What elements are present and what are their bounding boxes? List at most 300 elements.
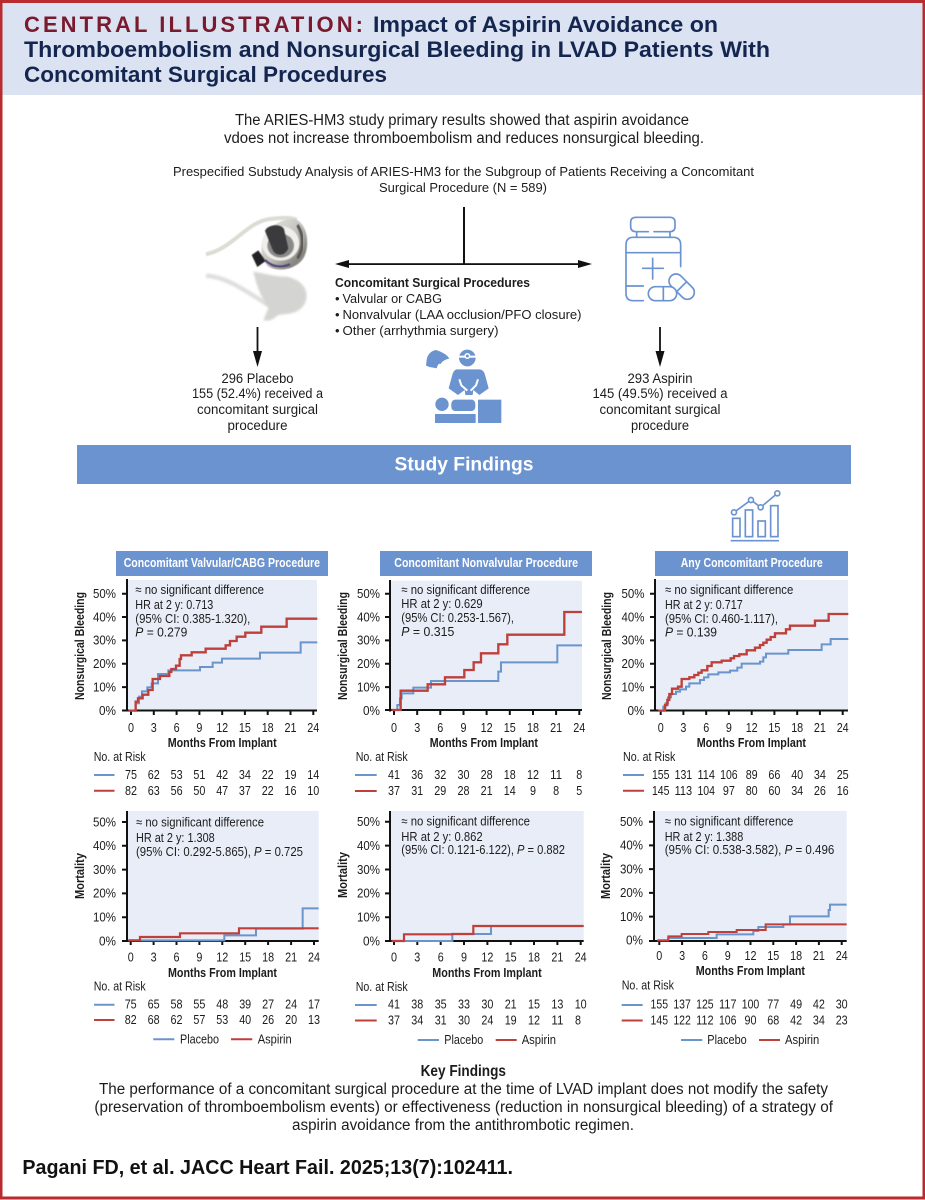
number at risk table: 21 xyxy=(505,996,517,1012)
number at risk table: 20 xyxy=(285,1012,297,1027)
y axis label: Mortality xyxy=(72,852,87,899)
x tick labels: 3 xyxy=(679,948,685,963)
number at risk table: 100 xyxy=(742,996,759,1012)
number at risk table: 11 xyxy=(550,767,562,782)
procedures list: • xyxy=(335,323,340,338)
legend: Aspirin xyxy=(522,1032,556,1047)
x tick labels: 3 xyxy=(151,950,157,964)
x tick labels: 24 xyxy=(837,720,849,735)
number at risk table: 125 xyxy=(696,996,714,1012)
number at risk table: 131 xyxy=(675,767,692,782)
number at risk table: 31 xyxy=(411,783,423,798)
y tick labels: 0% xyxy=(99,703,116,718)
x tick labels: 15 xyxy=(504,720,516,735)
panel heading: nonvalvular: Concomitant Nonvalvular Procedure xyxy=(394,556,578,570)
legend: Placebo xyxy=(444,1032,483,1047)
number at risk table: 68 xyxy=(148,1012,160,1027)
x tick labels: 15 xyxy=(768,720,780,735)
number at risk table xyxy=(94,749,319,798)
survival curves xyxy=(129,619,317,711)
y tick labels: 20% xyxy=(620,885,643,900)
procedures list: Other (arrhythmia surgery) xyxy=(342,323,498,338)
procedures list xyxy=(335,275,582,338)
y tick labels: 30% xyxy=(357,633,380,648)
annotation xyxy=(135,582,264,640)
intro text: The ARIES-HM3 study primary results showed that aspirin avoidance xyxy=(235,112,689,129)
panel heading: valvular/CABG: Concomitant Valvular/CABG Procedure xyxy=(124,556,320,570)
survival curves xyxy=(128,908,319,940)
number at risk table: 90 xyxy=(744,1012,756,1028)
procedures list: Valvular or CABG xyxy=(342,291,442,306)
number at risk table: 22 xyxy=(262,783,274,798)
number at risk table: 35 xyxy=(435,996,447,1012)
annotation: (95% CI: 0.385-1.320), xyxy=(135,611,250,626)
x tick labels: 15 xyxy=(767,948,779,963)
number at risk table: 68 xyxy=(767,1012,779,1028)
x tick labels: 6 xyxy=(702,948,708,963)
y tick labels: 40% xyxy=(357,609,380,624)
banner: Study Findings: Study Findings xyxy=(394,454,534,476)
number at risk table: 155 xyxy=(652,767,669,782)
x tick labels: 9 xyxy=(196,950,202,964)
x tick labels: 0 xyxy=(656,948,662,963)
key findings: (preservation of thromboembolism events) or effectiveness (reduction in nonsurgical bleeding) of a strategy of xyxy=(94,1099,834,1116)
number at risk table: 28 xyxy=(481,767,493,782)
number at risk table: 26 xyxy=(814,783,826,798)
y tick labels: 0% xyxy=(628,703,645,718)
number at risk table: 80 xyxy=(746,783,758,798)
placebo arm text xyxy=(192,371,323,433)
y tick labels: 50% xyxy=(620,814,643,829)
title: Concomitant Surgical Procedures xyxy=(24,62,387,87)
x tick labels: 6 xyxy=(703,720,709,735)
number at risk table: 49 xyxy=(790,996,802,1012)
x tick labels xyxy=(128,720,319,735)
annotation: P = 0.139 xyxy=(665,624,717,640)
legend: Placebo xyxy=(707,1032,747,1047)
y tick labels: 30% xyxy=(93,862,116,877)
x tick labels: 6 xyxy=(174,720,180,735)
y tick labels: 20% xyxy=(622,656,645,671)
number at risk table: 47 xyxy=(216,783,228,798)
y tick labels: 20% xyxy=(357,886,380,901)
placebo arm text: 155 (52.4%) received a xyxy=(192,386,323,401)
number at risk table: 56 xyxy=(171,783,183,798)
number at risk table: 23 xyxy=(836,1012,848,1028)
x tick labels: 24 xyxy=(836,948,848,963)
y axis label: Nonsurgical Bleeding xyxy=(72,592,87,700)
y tick labels xyxy=(357,586,380,718)
y tick labels: 50% xyxy=(357,586,380,601)
number at risk table: 32 xyxy=(434,767,446,782)
number at risk table: 12 xyxy=(528,1012,540,1028)
number at risk table: 13 xyxy=(308,1012,320,1027)
annotation: HR at 2 y: 0.862 xyxy=(401,829,483,844)
y tick labels: 40% xyxy=(357,838,380,853)
y axis label: Nonsurgical Bleeding xyxy=(599,592,614,700)
chart: nonsurgical bleeding, any procedure xyxy=(599,579,849,798)
survival curves xyxy=(658,614,848,711)
number at risk table: No. at Risk xyxy=(622,978,674,992)
y tick labels: 40% xyxy=(93,838,116,853)
x tick labels: 0 xyxy=(658,720,664,735)
number at risk table: 145 xyxy=(652,783,669,798)
substudy description: Prespecified Substudy Analysis of ARIES-HM3 for the Subgroup of Patients Receiving a Concomitant xyxy=(173,164,754,179)
annotation: (95% CI: 0.253-1.567), xyxy=(401,610,514,625)
x tick labels: 24 xyxy=(573,720,585,735)
y tick labels: 50% xyxy=(93,814,116,829)
number at risk table: 62 xyxy=(170,1012,182,1027)
number at risk table: 57 xyxy=(193,1012,205,1027)
number at risk table: 106 xyxy=(720,767,738,782)
number at risk table: 53 xyxy=(216,1012,228,1027)
y tick labels: 50% xyxy=(622,586,645,601)
x tick labels: 9 xyxy=(461,950,467,964)
annotation: HR at 2 y: 0.629 xyxy=(401,596,483,611)
y tick labels xyxy=(93,814,116,948)
x tick labels: 3 xyxy=(414,720,420,735)
icon: bar chart with trend line xyxy=(731,491,780,541)
number at risk table: 10 xyxy=(575,996,587,1012)
x tick labels: 3 xyxy=(680,720,686,735)
key findings: The performance of a concomitant surgical procedure at the time of LVAD implant does not modify the safety xyxy=(99,1081,828,1098)
legend xyxy=(681,1032,819,1047)
number at risk table: 75 xyxy=(125,767,137,782)
x tick labels: 12 xyxy=(746,720,758,735)
x tick labels: 21 xyxy=(813,948,825,963)
annotation: P = 0.279 xyxy=(135,624,187,640)
chart: nonsurgical bleeding, nonvalvular xyxy=(335,580,585,798)
citation: Pagani FD, et al. JACC Heart Fail. 2025;13(7):102411. xyxy=(22,1157,513,1179)
y tick labels: 50% xyxy=(357,814,380,829)
number at risk table: 34 xyxy=(814,767,826,782)
number at risk table: 19 xyxy=(284,767,296,782)
key findings: aspirin avoidance from the antithrombotic regimen. xyxy=(292,1117,634,1134)
number at risk table xyxy=(623,749,849,798)
legend: Placebo xyxy=(180,1032,219,1046)
number at risk table: 106 xyxy=(719,1012,736,1028)
number at risk table: 58 xyxy=(170,996,182,1012)
key findings: Key Findings xyxy=(421,1063,506,1080)
number at risk table: 33 xyxy=(458,996,470,1012)
x axis label: Months From Implant xyxy=(430,735,539,750)
number at risk table: 122 xyxy=(673,1012,691,1028)
x axis label: Months From Implant xyxy=(168,965,278,980)
y tick labels xyxy=(620,814,643,948)
number at risk table xyxy=(94,978,320,1027)
number at risk table: 34 xyxy=(411,1012,423,1028)
number at risk table: No. at Risk xyxy=(356,979,408,994)
y tick labels xyxy=(357,814,380,948)
aspirin arm text: 145 (49.5%) received a xyxy=(592,386,728,401)
key findings xyxy=(94,1063,834,1134)
number at risk table: 104 xyxy=(697,783,715,798)
icon: surgeon and patient xyxy=(426,350,501,423)
number at risk table: 8 xyxy=(553,783,559,798)
x tick labels: 18 xyxy=(527,720,539,735)
number at risk table: 97 xyxy=(723,783,735,798)
y tick labels: 10% xyxy=(357,679,380,694)
number at risk table: 42 xyxy=(216,767,228,782)
x tick labels: 21 xyxy=(551,950,563,964)
y tick labels: 10% xyxy=(357,910,380,924)
annotation: HR at 2 y: 0.717 xyxy=(665,597,743,612)
y tick labels: 0% xyxy=(363,933,380,948)
annotation: (95% CI: 0.292-5.865), P = 0.725 xyxy=(136,844,303,859)
number at risk table: 34 xyxy=(813,1012,825,1028)
annotation: (95% CI: 0.121-6.122), P = 0.882 xyxy=(401,842,565,857)
number at risk table: 155 xyxy=(651,996,668,1012)
x tick labels: 0 xyxy=(391,720,397,735)
number at risk table: 38 xyxy=(411,996,423,1012)
annotation: ≈ no significant difference xyxy=(136,815,264,830)
placebo arm text: concomitant surgical xyxy=(197,402,318,417)
y tick labels: 30% xyxy=(357,862,380,877)
x tick labels: 18 xyxy=(791,720,803,735)
number at risk table: 145 xyxy=(651,1012,668,1028)
annotation xyxy=(665,582,793,640)
number at risk table: 41 xyxy=(388,767,400,782)
x tick labels: 18 xyxy=(790,948,802,963)
number at risk table: 11 xyxy=(551,1012,563,1028)
annotation: HR at 2 y: 1.388 xyxy=(665,829,743,844)
x axis label: Months From Implant xyxy=(432,965,542,980)
y tick labels: 40% xyxy=(620,838,643,853)
survival curves xyxy=(392,612,582,710)
panel heading: any procedure xyxy=(655,551,848,576)
y tick labels: 20% xyxy=(93,656,116,671)
x tick labels: 18 xyxy=(528,950,540,964)
number at risk table: 19 xyxy=(505,1012,517,1028)
y tick labels: 20% xyxy=(357,656,380,671)
panel heading: any procedure: Any Concomitant Procedure xyxy=(681,556,823,570)
number at risk table: 114 xyxy=(697,767,715,782)
number at risk table: 34 xyxy=(239,767,251,782)
number at risk table xyxy=(355,749,582,798)
y tick labels: 0% xyxy=(363,703,380,718)
x tick labels: 24 xyxy=(308,950,320,964)
x tick labels: 18 xyxy=(262,720,274,735)
number at risk table: 15 xyxy=(528,996,540,1012)
number at risk table: 5 xyxy=(576,783,582,798)
number at risk table: 28 xyxy=(458,783,470,798)
y tick labels: 0% xyxy=(626,933,643,948)
y axis label: Nonsurgical Bleeding xyxy=(335,592,350,700)
number at risk table: 9 xyxy=(530,783,536,798)
y tick labels: 10% xyxy=(93,910,116,924)
chart: mortality, valvular/CABG xyxy=(72,811,320,1046)
number at risk table: No. at Risk xyxy=(623,749,676,764)
aspirin arm text: procedure xyxy=(631,418,689,433)
x tick labels: 15 xyxy=(239,950,251,964)
number at risk table: 30 xyxy=(836,996,848,1012)
x tick labels xyxy=(128,950,320,964)
intro text: vdoes not increase thromboembolism and reduces nonsurgical bleeding. xyxy=(224,130,704,147)
x tick labels: 21 xyxy=(284,720,296,735)
x tick labels: 12 xyxy=(481,950,493,964)
number at risk table: 14 xyxy=(307,767,319,782)
icon: LVAD pump xyxy=(206,218,307,321)
panel heading: nonvalvular xyxy=(380,551,592,576)
icon: medication bottle and pills xyxy=(626,217,697,302)
number at risk table: 40 xyxy=(791,767,803,782)
number at risk table: 55 xyxy=(193,996,205,1012)
number at risk table: 112 xyxy=(696,1012,714,1028)
substudy description xyxy=(173,164,754,195)
annotation: (95% CI: 0.538-3.582), P = 0.496 xyxy=(665,842,834,857)
legend xyxy=(418,1032,556,1047)
x tick labels: 6 xyxy=(437,720,443,735)
number at risk table: 42 xyxy=(813,996,825,1012)
x tick labels: 9 xyxy=(726,720,732,735)
y tick labels: 10% xyxy=(622,679,645,694)
annotation: ≈ no significant difference xyxy=(135,582,264,597)
number at risk table: 31 xyxy=(435,1012,447,1028)
survival curves xyxy=(392,926,584,941)
x tick labels: 3 xyxy=(414,950,420,964)
intro text xyxy=(224,112,704,147)
number at risk table: 60 xyxy=(768,783,780,798)
number at risk table: 18 xyxy=(504,767,516,782)
number at risk table: 66 xyxy=(768,767,780,782)
x tick labels: 12 xyxy=(481,720,493,735)
number at risk table: 17 xyxy=(308,996,320,1012)
chart: mortality, any procedure xyxy=(598,811,848,1047)
number at risk table: 48 xyxy=(216,996,228,1012)
number at risk table: 82 xyxy=(125,1012,137,1027)
aspirin arm text: concomitant surgical xyxy=(600,402,720,417)
number at risk table xyxy=(622,978,848,1028)
title: Impact of Aspirin Avoidance on xyxy=(373,12,718,37)
number at risk table: 14 xyxy=(504,783,516,798)
y axis label: Mortality xyxy=(598,852,613,899)
survival curves xyxy=(657,905,847,940)
number at risk table: 26 xyxy=(262,1012,274,1027)
number at risk table: 39 xyxy=(239,996,251,1012)
x tick labels: 6 xyxy=(438,950,444,964)
number at risk table: 41 xyxy=(388,996,400,1012)
annotation: (95% CI: 0.460-1.117), xyxy=(665,611,778,626)
y tick labels: 30% xyxy=(93,633,116,648)
title: CENTRAL ILLUSTRATION: xyxy=(24,12,363,37)
annotation: ≈ no significant difference xyxy=(665,814,793,828)
title xyxy=(24,12,770,87)
panel heading: valvular/CABG xyxy=(116,551,328,576)
annotation xyxy=(401,814,565,857)
x tick labels: 9 xyxy=(725,948,731,963)
x tick labels: 12 xyxy=(744,948,756,963)
y tick labels: 40% xyxy=(622,609,645,624)
procedures list: • xyxy=(335,291,340,306)
number at risk table: 65 xyxy=(148,996,160,1012)
number at risk table: 24 xyxy=(481,1012,493,1028)
x tick labels: 0 xyxy=(391,950,397,964)
arrow: placebo arm xyxy=(253,327,262,367)
x tick labels: 12 xyxy=(216,950,228,964)
x tick labels: 3 xyxy=(151,720,157,735)
number at risk table: No. at Risk xyxy=(94,749,146,764)
annotation: HR at 2 y: 0.713 xyxy=(135,597,213,612)
x tick labels: 0 xyxy=(128,950,134,964)
y tick labels: 40% xyxy=(93,609,116,624)
number at risk table: 53 xyxy=(171,767,183,782)
number at risk table: 30 xyxy=(458,767,470,782)
aspirin arm text xyxy=(592,371,728,433)
number at risk table: 30 xyxy=(481,996,493,1012)
number at risk table: 36 xyxy=(411,767,423,782)
aspirin arm text: 293 Aspirin xyxy=(628,371,692,386)
banner: Study Findings xyxy=(77,445,851,484)
arrow: aspirin arm xyxy=(656,327,664,367)
y axis label: Mortality xyxy=(335,851,350,898)
placebo arm text: 296 Placebo xyxy=(222,371,294,386)
number at risk table: 27 xyxy=(262,996,274,1012)
number at risk table: 51 xyxy=(193,767,205,782)
y tick labels: 30% xyxy=(622,633,645,648)
x tick labels: 15 xyxy=(505,950,517,964)
number at risk table: 42 xyxy=(790,1012,802,1028)
placebo arm text: procedure xyxy=(228,418,288,433)
number at risk table: 62 xyxy=(148,767,160,782)
title: Thromboembolism and Nonsurgical Bleeding in LVAD Patients With xyxy=(24,37,770,62)
number at risk table: 37 xyxy=(388,783,400,798)
number at risk table: 25 xyxy=(837,767,849,782)
annotation: ≈ no significant difference xyxy=(401,582,530,597)
x axis label: Months From Implant xyxy=(697,735,807,750)
number at risk table: 10 xyxy=(307,783,319,798)
y tick labels: 10% xyxy=(620,909,643,924)
number at risk table: 50 xyxy=(193,783,205,798)
number at risk table: 82 xyxy=(125,783,137,798)
x tick labels: 24 xyxy=(307,720,319,735)
annotation xyxy=(401,582,530,639)
x tick labels: 15 xyxy=(239,720,251,735)
number at risk table: 12 xyxy=(527,767,539,782)
number at risk table: 16 xyxy=(837,783,849,798)
number at risk table: 29 xyxy=(434,783,446,798)
number at risk table: 89 xyxy=(746,767,758,782)
y tick labels xyxy=(622,586,645,718)
y tick labels: 10% xyxy=(93,679,116,694)
number at risk table: 8 xyxy=(576,767,582,782)
number at risk table: 117 xyxy=(719,996,736,1012)
number at risk table: No. at Risk xyxy=(356,749,408,764)
x axis label: Months From Implant xyxy=(696,963,806,978)
number at risk table: 75 xyxy=(125,996,137,1012)
x tick labels: 12 xyxy=(216,720,228,735)
chart: nonsurgical bleeding, valvular/CABG xyxy=(72,579,319,798)
x tick labels: 24 xyxy=(575,950,587,964)
chart: mortality, nonvalvular xyxy=(335,811,587,1047)
number at risk table: 8 xyxy=(575,1012,581,1028)
x tick labels: 0 xyxy=(128,720,134,735)
number at risk table: No. at Risk xyxy=(94,978,146,994)
annotation xyxy=(665,814,834,857)
x tick labels: 9 xyxy=(460,720,466,735)
legend: Aspirin xyxy=(785,1032,819,1047)
x tick labels: 21 xyxy=(814,720,826,735)
header band xyxy=(0,0,925,95)
number at risk table: 13 xyxy=(551,996,563,1012)
x tick labels xyxy=(658,720,849,735)
x tick labels xyxy=(391,720,585,735)
x axis label: Months From Implant xyxy=(168,735,277,750)
x tick labels: 21 xyxy=(285,950,297,964)
x tick labels: 6 xyxy=(174,950,180,964)
number at risk table: 63 xyxy=(148,783,160,798)
x tick labels: 9 xyxy=(196,720,202,735)
arrow: split to treatment arms xyxy=(335,207,592,268)
